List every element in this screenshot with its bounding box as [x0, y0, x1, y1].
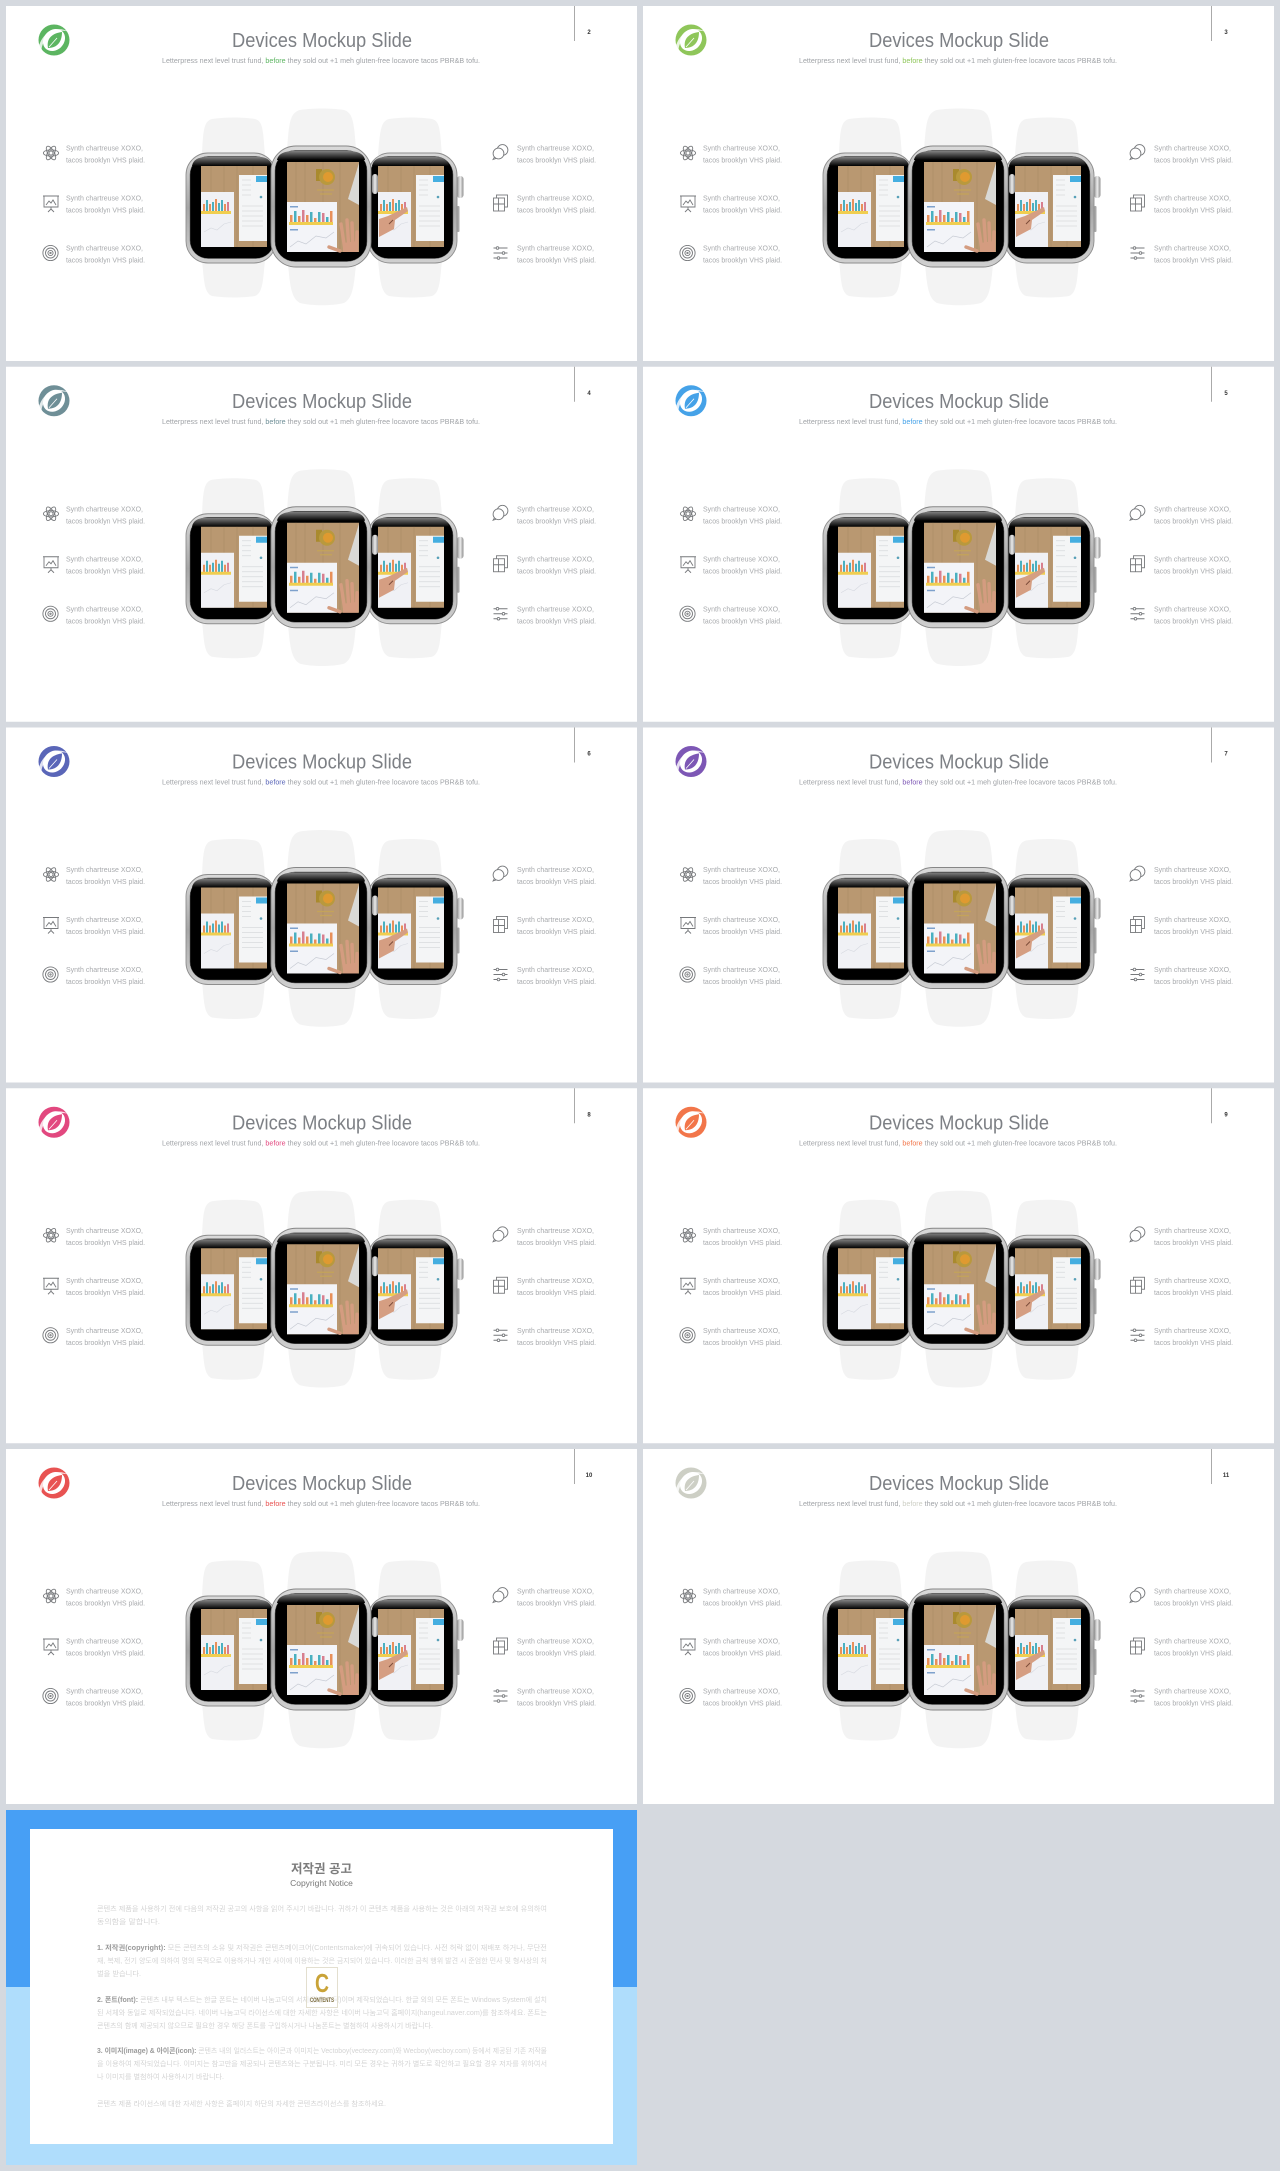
feature: layers: Synth chartreuse XOXO, [517, 554, 594, 563]
panel: slide 4 [6, 367, 637, 722]
page number: 11 [1223, 1473, 1230, 1479]
feature: presentation [680, 1636, 782, 1658]
feature: atom: tacos brooklyn VHS plaid. [66, 516, 145, 525]
feature: layers: Synth chartreuse XOXO, [1154, 194, 1231, 202]
subtitle: Letterpress next level trust fund, before they sold out +1 meh gluten-free locavore tacos PBR&B tofu. [162, 1138, 480, 1147]
device mockup: three watches [186, 1552, 464, 1748]
subtitle: Letterpress next level trust fund, before they sold out +1 meh gluten-free locavore tacos PBR&B tofu. [799, 56, 1117, 65]
feature: atom [43, 865, 145, 886]
panel: slide 8 [6, 1088, 637, 1443]
heading: 저작권 공고 [291, 1861, 352, 1876]
subtitle: Letterpress next level trust fund, before they sold out +1 meh gluten-free locavore tacos PBR&B tofu. [162, 417, 480, 426]
feature: target [43, 1326, 145, 1347]
feature: sliders: Synth chartreuse XOXO, [517, 1326, 594, 1335]
paragraph: font: 콘텐츠의 함께 제공되지 않으므로 필요한 경우 해당 폰트를 구입하시거나 나눔폰트는 별첨하여 사용하시기 바랍니다. [97, 2021, 433, 2030]
feature: sliders: tacos brooklyn VHS plaid. [1154, 616, 1233, 625]
feature: chat: tacos brooklyn VHS plaid. [1154, 877, 1233, 886]
icon: orange leaf logo [675, 1107, 707, 1138]
feature: atom: tacos brooklyn VHS plaid. [703, 1598, 782, 1608]
intro paragraph: 콘텐츠 제품을 사용하기 전에 다음의 저작권 공고의 사항을 읽어 주시기 바랍니다. 귀하가 이 콘텐츠 제품을 사용하는 것은 아래의 저작권 보호에 유의하여 [97, 1904, 547, 1913]
feature: atom [43, 1226, 145, 1247]
feature: sliders [494, 604, 596, 625]
icon: slate leaf logo [38, 385, 70, 416]
feature: target: tacos brooklyn VHS plaid. [703, 1338, 782, 1347]
feature: atom [680, 1226, 782, 1247]
feature: presentation: tacos brooklyn VHS plaid. [66, 1288, 145, 1297]
subtitle: Letterpress next level trust fund, before they sold out +1 meh gluten-free locavore tacos PBR&B tofu. [162, 56, 480, 65]
icon: indigo leaf logo [38, 746, 70, 777]
feature: chat [1130, 504, 1233, 525]
icon: light green leaf logo [675, 24, 707, 56]
feature: target: tacos brooklyn VHS plaid. [66, 616, 145, 625]
feature: atom: Synth chartreuse XOXO, [703, 504, 780, 513]
feature: chat: tacos brooklyn VHS plaid. [517, 1238, 596, 1247]
feature: chat: tacos brooklyn VHS plaid. [1154, 516, 1233, 525]
page number: 5 [1224, 391, 1228, 397]
title: Devices Mockup Slide [869, 30, 1049, 52]
feature: sliders: Synth chartreuse XOXO, [1154, 1686, 1231, 1696]
feature: chat: Synth chartreuse XOXO, [517, 1226, 594, 1235]
subtitle: Letterpress next level trust fund, before they sold out +1 meh gluten-free locavore tacos PBR&B tofu. [799, 417, 1117, 426]
panel: slide 11 [643, 1449, 1274, 1804]
feature: sliders: Synth chartreuse XOXO, [1154, 965, 1231, 974]
feature: sliders: tacos brooklyn VHS plaid. [517, 1338, 596, 1347]
feature: chat [493, 504, 596, 525]
panel: slide 2 [6, 6, 637, 361]
page number: 3 [1224, 30, 1228, 36]
feature: sliders [1130, 1326, 1233, 1347]
title: Devices Mockup Slide [869, 391, 1049, 413]
paragraph: copyright: 벌을 받습니다. [97, 1969, 141, 1978]
white card [30, 1829, 613, 2144]
feature: sliders: Synth chartreuse XOXO, [1154, 1326, 1231, 1335]
feature: layers: Synth chartreuse XOXO, [517, 1636, 594, 1646]
panel: copyright notice [6, 1810, 637, 2165]
device mockup: three watches [823, 1552, 1100, 1748]
feature: atom [43, 144, 145, 164]
feature: layers: tacos brooklyn VHS plaid. [517, 1288, 596, 1297]
feature: presentation: tacos brooklyn VHS plaid. [703, 927, 782, 936]
feature: presentation [43, 554, 145, 575]
feature: presentation: Synth chartreuse XOXO, [703, 1636, 780, 1646]
page number [1212, 367, 1228, 402]
feature: target: tacos brooklyn VHS plaid. [703, 256, 782, 264]
feature: target: Synth chartreuse XOXO, [66, 244, 143, 252]
feature: sliders: Synth chartreuse XOXO, [1154, 604, 1231, 613]
panel: slide 10 [6, 1449, 637, 1804]
feature: sliders [494, 1686, 596, 1708]
panel: slide 5 [643, 367, 1274, 722]
feature: target: Synth chartreuse XOXO, [703, 965, 780, 974]
feature: target: tacos brooklyn VHS plaid. [66, 977, 145, 986]
feature: target: tacos brooklyn VHS plaid. [703, 616, 782, 625]
subtitle: Letterpress next level trust fund, before they sold out +1 meh gluten-free locavore tacos PBR&B tofu. [799, 1499, 1117, 1508]
page number [1212, 728, 1228, 762]
feature: chat: Synth chartreuse XOXO, [517, 865, 594, 874]
feature: chat [1130, 144, 1233, 164]
paragraph: font: 2. 폰트(font): 콘텐츠 내부 텍스트는 한글 폰트는 네이버 나눔고딕의 서체(맑은 고딕)이며 제작되었습니다. 한글 외의 모든 폰트는 Windows System에 설치 [97, 1995, 547, 2004]
feature: presentation: Synth chartreuse XOXO, [66, 194, 143, 202]
feature: presentation: Synth chartreuse XOXO, [66, 554, 143, 563]
slide background [643, 6, 1274, 361]
icon: blue leaf logo [675, 385, 707, 416]
subtitle: Letterpress next level trust fund, before they sold out +1 meh gluten-free locavore tacos PBR&B tofu. [799, 1138, 1117, 1147]
title: Devices Mockup Slide [869, 1112, 1049, 1134]
feature: sliders: Synth chartreuse XOXO, [517, 965, 594, 974]
feature: presentation: tacos brooklyn VHS plaid. [66, 566, 145, 575]
feature: chat: tacos brooklyn VHS plaid. [1154, 1238, 1233, 1247]
gold C logo: C [315, 1968, 329, 1998]
feature: presentation: Synth chartreuse XOXO, [66, 915, 143, 924]
icon: red leaf logo [38, 1467, 70, 1499]
device mockup: three watches [186, 108, 464, 305]
intro paragraph: 동의함을 말합니다. [97, 1917, 160, 1926]
subtitle: Letterpress next level trust fund, before they sold out +1 meh gluten-free locavore tacos PBR&B tofu. [162, 1499, 480, 1508]
feature: target: Synth chartreuse XOXO, [66, 1326, 143, 1335]
feature: target [680, 965, 782, 986]
feature: layers: Synth chartreuse XOXO, [517, 194, 594, 202]
feature: presentation [680, 1276, 782, 1297]
title: Devices Mockup Slide [232, 391, 412, 413]
slide background [643, 1088, 1274, 1443]
feature: presentation: tacos brooklyn VHS plaid. [703, 566, 782, 575]
feature: presentation: tacos brooklyn VHS plaid. [66, 927, 145, 936]
page number: 8 [587, 1112, 591, 1118]
feature: presentation [680, 554, 782, 575]
feature: atom [43, 1586, 145, 1608]
feature: atom: Synth chartreuse XOXO, [66, 1586, 143, 1596]
paragraph: copyright [97, 1943, 547, 1978]
slide background [643, 1449, 1274, 1804]
device mockup: three watches [823, 469, 1100, 666]
feature: atom: Synth chartreuse XOXO, [66, 1226, 143, 1235]
feature: layers: Synth chartreuse XOXO, [1154, 915, 1231, 924]
feature: chat [1130, 1586, 1233, 1608]
feature: atom: tacos brooklyn VHS plaid. [66, 877, 145, 886]
feature: target: Synth chartreuse XOXO, [66, 1686, 143, 1696]
feature: atom: tacos brooklyn VHS plaid. [703, 1238, 782, 1247]
icon: pink leaf logo [38, 1107, 70, 1138]
slide background [6, 6, 637, 361]
feature: atom: tacos brooklyn VHS plaid. [66, 156, 145, 164]
feature: layers [1130, 554, 1233, 575]
feature: presentation [43, 194, 145, 214]
feature: presentation: Synth chartreuse XOXO, [703, 915, 780, 924]
feature: atom: Synth chartreuse XOXO, [66, 504, 143, 513]
paragraph: copyright: 1. 저작권(copyright): 모든 콘텐츠의 소유 및 저작권은 콘텐츠메이크어(Contentsmaker)에 귀속되어 있습니다. 사전 허락 없이 재배포 하거나, 무단전 [97, 1943, 547, 1952]
feature: atom: Synth chartreuse XOXO, [66, 865, 143, 874]
feature: layers [1130, 194, 1233, 214]
feature: sliders: tacos brooklyn VHS plaid. [517, 1698, 596, 1708]
feature: target: Synth chartreuse XOXO, [703, 244, 780, 252]
light blue lower background [6, 1987, 637, 2165]
device mockup: three watches [186, 1191, 464, 1388]
feature: chat: Synth chartreuse XOXO, [1154, 144, 1231, 152]
feature: chat: tacos brooklyn VHS plaid. [517, 877, 596, 886]
feature: sliders: tacos brooklyn VHS plaid. [1154, 256, 1233, 264]
feature: layers: tacos brooklyn VHS plaid. [1154, 566, 1233, 575]
feature: layers [494, 1276, 596, 1297]
icon: grey leaf logo [675, 1467, 707, 1499]
feature: chat: Synth chartreuse XOXO, [1154, 865, 1231, 874]
feature: chat: tacos brooklyn VHS plaid. [1154, 156, 1233, 164]
feature: atom [680, 504, 782, 525]
feature: sliders [1130, 1686, 1233, 1708]
feature: chat [1130, 1226, 1233, 1247]
device mockup: three watches [823, 830, 1100, 1027]
feature: target [43, 1686, 145, 1708]
slide background [643, 728, 1274, 1082]
title: Devices Mockup Slide [869, 752, 1049, 774]
feature: atom: Synth chartreuse XOXO, [703, 1586, 780, 1596]
page number: 2 [587, 30, 591, 36]
feature: target: Synth chartreuse XOXO, [66, 604, 143, 613]
feature: chat: Synth chartreuse XOXO, [517, 504, 594, 513]
feature: chat [493, 865, 596, 886]
feature: chat: tacos brooklyn VHS plaid. [517, 1598, 596, 1608]
page number [1212, 6, 1228, 41]
title: Devices Mockup Slide [232, 1112, 412, 1134]
feature: presentation: Synth chartreuse XOXO, [703, 554, 780, 563]
feature: atom: Synth chartreuse XOXO, [66, 144, 143, 152]
panel: slide 3 [643, 6, 1274, 361]
device mockup: three watches [823, 1191, 1100, 1388]
paragraph: copyright: 재, 복제, 전기 양도에 의하여 명의 목적으로 이용하거나 개인 사이에 이용하는 것은 금지되어 있습니다. 이러한 금칙 행위 발견 시 준엄한 민사 및 형사상의 처 [97, 1956, 547, 1965]
feature: sliders: tacos brooklyn VHS plaid. [517, 256, 596, 264]
paragraph: images and icons: 을 이용하여 제작되었습니다. 이미지는 참고만을 제공되나 콘텐츠와는 구분됩니다. 미리 모든 경우는 귀하가 별도로 확인하고 필요할 경우 저자를 위하여서 [97, 2059, 547, 2068]
feature: layers [494, 915, 596, 936]
icon: green leaf logo [38, 24, 70, 56]
title: Devices Mockup Slide [869, 1473, 1049, 1495]
feature: target [43, 244, 145, 264]
feature: sliders: Synth chartreuse XOXO, [517, 604, 594, 613]
feature: presentation: tacos brooklyn VHS plaid. [703, 1288, 782, 1297]
feature: chat [493, 144, 596, 164]
feature: presentation [680, 915, 782, 936]
feature: sliders: Synth chartreuse XOXO, [517, 244, 594, 252]
feature: presentation [680, 194, 782, 214]
feature: atom [680, 144, 782, 164]
feature: presentation: tacos brooklyn VHS plaid. [66, 1648, 145, 1658]
feature: presentation: Synth chartreuse XOXO, [66, 1276, 143, 1285]
page number [574, 1088, 591, 1123]
feature: atom [680, 1586, 782, 1608]
feature: layers [1130, 1636, 1233, 1658]
feature: sliders: tacos brooklyn VHS plaid. [517, 616, 596, 625]
feature: layers: Synth chartreuse XOXO, [517, 1276, 594, 1285]
feature: chat: tacos brooklyn VHS plaid. [517, 516, 596, 525]
feature: layers [494, 194, 596, 214]
feature: presentation: tacos brooklyn VHS plaid. [66, 206, 145, 214]
slide background [6, 367, 637, 722]
feature: chat [1130, 865, 1233, 886]
feature: presentation: tacos brooklyn VHS plaid. [703, 1648, 782, 1658]
feature: layers: tacos brooklyn VHS plaid. [1154, 206, 1233, 214]
paragraph: images and icons [97, 2046, 548, 2081]
page number [574, 728, 591, 762]
feature: presentation [43, 1276, 145, 1297]
slide background [643, 367, 1274, 722]
feature: layers: Synth chartreuse XOXO, [517, 915, 594, 924]
feature: atom: Synth chartreuse XOXO, [703, 865, 780, 874]
feature: sliders [1130, 604, 1233, 625]
feature: atom [680, 865, 782, 886]
device mockup: three watches [823, 108, 1100, 305]
subheading: Copyright Notice [290, 1878, 353, 1888]
feature: layers: Synth chartreuse XOXO, [1154, 554, 1231, 563]
feature: layers: tacos brooklyn VHS plaid. [517, 1648, 596, 1658]
feature: layers: tacos brooklyn VHS plaid. [517, 566, 596, 575]
title: Devices Mockup Slide [232, 30, 412, 52]
title: Devices Mockup Slide [232, 752, 412, 774]
icon: purple leaf logo [675, 746, 707, 777]
feature: layers: tacos brooklyn VHS plaid. [1154, 1648, 1233, 1658]
feature: chat: Synth chartreuse XOXO, [1154, 504, 1231, 513]
feature: chat: Synth chartreuse XOXO, [1154, 1226, 1231, 1235]
feature: presentation [43, 915, 145, 936]
page number [1212, 1449, 1230, 1484]
feature: target: tacos brooklyn VHS plaid. [66, 1698, 145, 1708]
paragraph: font [97, 1995, 548, 2030]
feature: sliders: Synth chartreuse XOXO, [1154, 244, 1231, 252]
slide background [6, 1449, 637, 1804]
feature: layers [1130, 1276, 1233, 1297]
page number [574, 367, 591, 402]
feature: target [43, 965, 145, 986]
feature: sliders [494, 1326, 596, 1347]
paragraph: images and icons: 3. 이미지(image) & 아이콘(icon): 콘텐츠 내의 일러스트는 아이콘과 이미지는 Vectoboy(vecteezy.com)와 Wecboy(wecboy.com) 등에서 제공된 기존 저작물 [97, 2046, 548, 2055]
feature: sliders: Synth chartreuse XOXO, [517, 1686, 594, 1696]
feature: chat: Synth chartreuse XOXO, [1154, 1586, 1231, 1596]
page number [574, 1449, 593, 1484]
feature: atom: Synth chartreuse XOXO, [703, 144, 780, 152]
feature: presentation: Synth chartreuse XOXO, [66, 1636, 143, 1646]
title: Devices Mockup Slide [232, 1473, 412, 1495]
feature: layers: tacos brooklyn VHS plaid. [517, 927, 596, 936]
feature: chat [493, 1226, 596, 1247]
feature: layers [1130, 915, 1233, 936]
feature: layers [494, 1636, 596, 1658]
panel: slide 7 [643, 728, 1274, 1082]
feature: atom: tacos brooklyn VHS plaid. [703, 156, 782, 164]
feature: presentation [43, 1636, 145, 1658]
closing line: 콘텐츠 제품 라이선스에 대한 자세한 사항은 홈페이지 하단의 자세한 콘텐츠라이선스를 참조하세요. [97, 2099, 386, 2108]
page number: 7 [1224, 752, 1228, 758]
feature: layers: Synth chartreuse XOXO, [1154, 1636, 1231, 1646]
feature: target: Synth chartreuse XOXO, [66, 965, 143, 974]
feature: target: Synth chartreuse XOXO, [703, 1326, 780, 1335]
blue upper background [6, 1810, 637, 1987]
subtitle: Letterpress next level trust fund, before they sold out +1 meh gluten-free locavore tacos PBR&B tofu. [162, 778, 480, 786]
intro paragraph [97, 1904, 547, 1926]
feature: atom: tacos brooklyn VHS plaid. [66, 1238, 145, 1247]
feature: layers: tacos brooklyn VHS plaid. [1154, 1288, 1233, 1297]
paragraph: font: 된 서체와 동일로 제작되었습니다. 네이버 나눔고딕 라이선스에 대한 자세한 사항은 네이버 나눔고딕 홈페이지(hangeul.naver.com)를 참조하세요. 폰트는 [97, 2008, 548, 2017]
feature: atom: Synth chartreuse XOXO, [703, 1226, 780, 1235]
feature: layers [494, 554, 596, 575]
page number [574, 6, 591, 41]
feature: layers: tacos brooklyn VHS plaid. [1154, 927, 1233, 936]
feature: sliders [494, 965, 596, 986]
feature: target [680, 1686, 782, 1708]
feature: layers: tacos brooklyn VHS plaid. [517, 206, 596, 214]
paragraph: images and icons: 나 이미지를 별첨하여 사용하시기 바랍니다. [97, 2072, 224, 2081]
page number: 6 [587, 752, 591, 758]
feature: target [680, 604, 782, 625]
panel: slide 6 [6, 728, 637, 1082]
page number: 9 [1224, 1112, 1228, 1118]
feature: target: tacos brooklyn VHS plaid. [703, 977, 782, 986]
device mockup: three watches [186, 830, 464, 1027]
feature: atom: tacos brooklyn VHS plaid. [703, 877, 782, 886]
feature: atom [43, 504, 145, 525]
feature: target: tacos brooklyn VHS plaid. [66, 256, 145, 264]
panel: slide 9 [643, 1088, 1274, 1443]
feature: target: Synth chartreuse XOXO, [703, 1686, 780, 1696]
feature: sliders [494, 244, 596, 264]
device mockup: three watches [186, 469, 464, 666]
feature: chat: Synth chartreuse XOXO, [517, 144, 594, 152]
feature: sliders [1130, 244, 1233, 264]
feature: atom: tacos brooklyn VHS plaid. [703, 516, 782, 525]
feature: chat [493, 1586, 596, 1608]
feature: sliders [1130, 965, 1233, 986]
page number [1212, 1088, 1228, 1123]
feature: layers: Synth chartreuse XOXO, [1154, 1276, 1231, 1285]
page number: 4 [587, 391, 591, 397]
feature: sliders: tacos brooklyn VHS plaid. [1154, 1338, 1233, 1347]
feature: sliders: tacos brooklyn VHS plaid. [1154, 1698, 1233, 1708]
feature: target: tacos brooklyn VHS plaid. [66, 1338, 145, 1347]
slide background [6, 728, 637, 1082]
feature: chat: tacos brooklyn VHS plaid. [517, 156, 596, 164]
feature: sliders: tacos brooklyn VHS plaid. [517, 977, 596, 986]
feature: target: tacos brooklyn VHS plaid. [703, 1698, 782, 1708]
page number: 10 [586, 1473, 593, 1479]
feature: chat: Synth chartreuse XOXO, [517, 1586, 594, 1596]
feature: target: Synth chartreuse XOXO, [703, 604, 780, 613]
feature: presentation: Synth chartreuse XOXO, [703, 194, 780, 202]
feature: sliders: tacos brooklyn VHS plaid. [1154, 977, 1233, 986]
subtitle: Letterpress next level trust fund, before they sold out +1 meh gluten-free locavore tacos PBR&B tofu. [799, 778, 1117, 786]
gold C logo: CONTENTS [310, 1998, 334, 2004]
feature: target [680, 244, 782, 264]
feature: target [680, 1326, 782, 1347]
feature: chat: tacos brooklyn VHS plaid. [1154, 1598, 1233, 1608]
feature: target [43, 604, 145, 625]
feature: presentation: tacos brooklyn VHS plaid. [703, 206, 782, 214]
feature: presentation: Synth chartreuse XOXO, [703, 1276, 780, 1285]
gold C logo [306, 1968, 338, 2008]
slide background [6, 1088, 637, 1443]
feature: atom: tacos brooklyn VHS plaid. [66, 1598, 145, 1608]
